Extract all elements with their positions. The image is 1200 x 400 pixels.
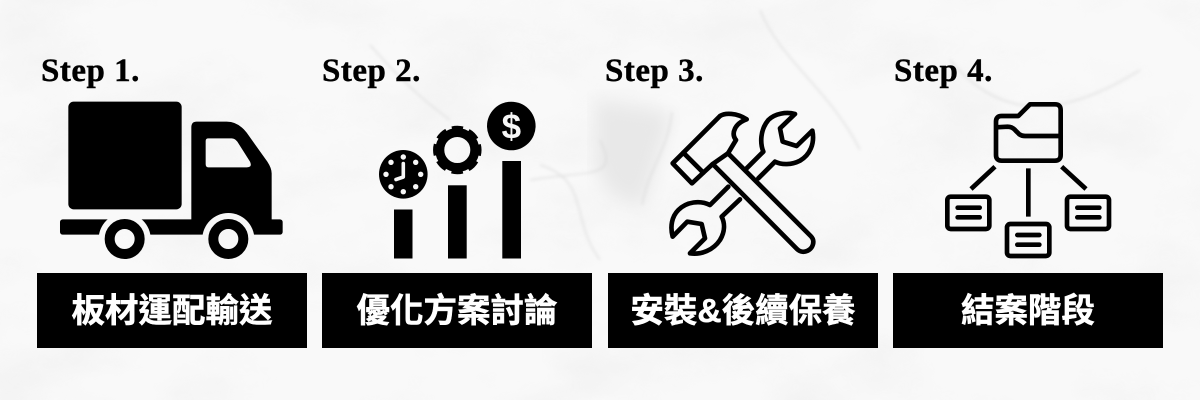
label bar: step 3: 安裝&後續保養	[630, 293, 856, 330]
heading: Step 3: Step 3.	[605, 53, 704, 89]
icons and step headings	[42, 59, 1112, 259]
icon: dollar coin	[487, 102, 536, 150]
label bar: step 1: 板材運配輸送	[72, 293, 272, 330]
label bar: step 1	[37, 273, 307, 348]
icon: clock	[379, 150, 428, 199]
label bar: step 2	[322, 273, 592, 348]
heading: Step 1: Step 1.	[41, 53, 140, 89]
icon: folder with three linked documents	[947, 104, 1109, 256]
label bar: step 2: 優化方案討論	[356, 293, 558, 330]
label bar: step 4	[893, 273, 1163, 348]
heading: Step 2: Step 2.	[322, 53, 421, 89]
label bar: step 3	[608, 273, 878, 348]
heading: Step 4: Step 4.	[894, 53, 993, 89]
icon: dollar coin: $	[502, 108, 521, 146]
icon: delivery truck	[60, 102, 283, 254]
label bar: step 4: 結案階段	[961, 293, 1095, 330]
icon: gear	[436, 128, 479, 172]
icon: crossed hammer and wrench	[671, 113, 813, 254]
icon: rising bars with clock, gear and dollar	[379, 102, 536, 258]
